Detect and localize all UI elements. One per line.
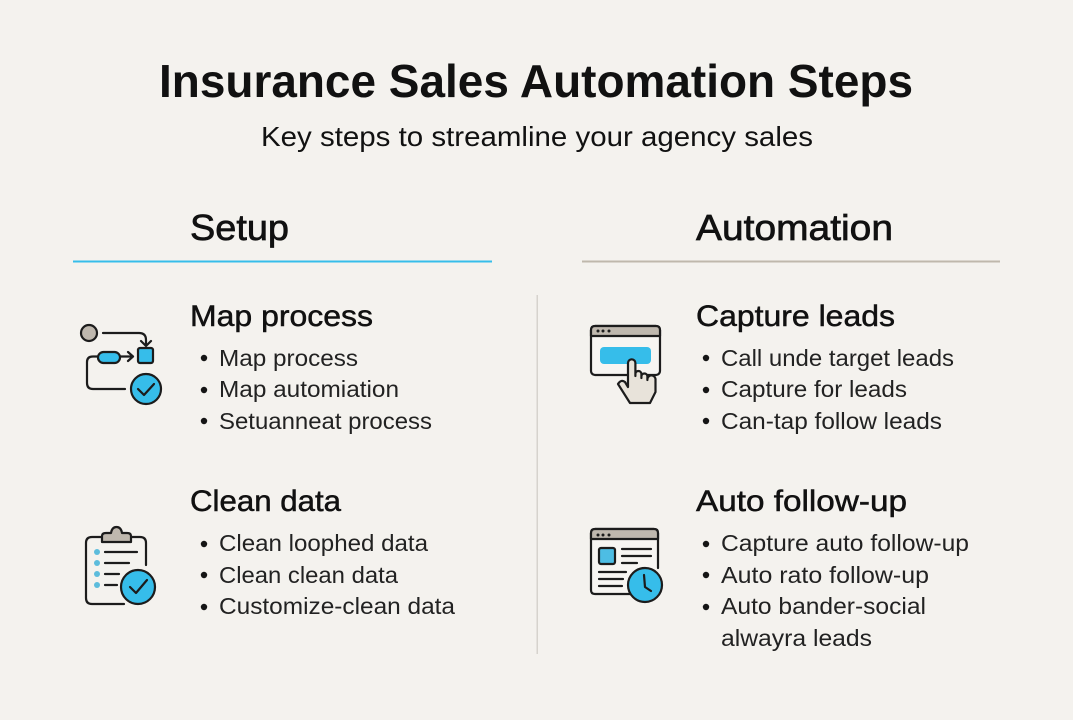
panel: Clean data xyxy=(86,485,456,619)
bullet list: Can-tap follow leads xyxy=(721,408,942,434)
column heading: Automation: Automation xyxy=(696,207,893,248)
panel: Capture leads xyxy=(591,300,954,434)
bullet list xyxy=(201,345,432,434)
title: Insurance Sales Automation Steps xyxy=(159,55,913,107)
bullet list xyxy=(201,530,456,619)
bullet list: Clean loophed data xyxy=(219,530,429,556)
bullet list: Map automiation xyxy=(219,376,399,402)
panel: Auto follow-up xyxy=(591,485,969,651)
bullet list: Clean clean data xyxy=(219,562,399,588)
column heading: Setup: Setup xyxy=(190,207,289,248)
heading: Clean data xyxy=(190,485,341,518)
bullet list: Call unde target leads xyxy=(721,345,954,371)
bullet list: Auto rato follow-up xyxy=(721,562,929,588)
heading: Auto follow-up xyxy=(696,485,907,518)
icon: clipboard checklist xyxy=(86,527,155,604)
panel: Map process xyxy=(81,300,432,434)
bullet list: alwayra leads xyxy=(721,625,872,651)
icon: process flow xyxy=(81,325,161,404)
bullet list: Capture auto follow-up xyxy=(721,530,969,556)
bullet list xyxy=(703,345,954,434)
heading: Map process xyxy=(190,300,373,333)
icon: browser with clock xyxy=(591,529,662,602)
bullet list: Auto bander-social xyxy=(721,593,926,619)
bullet list xyxy=(703,530,969,651)
bullet list: Customize-clean data xyxy=(219,593,456,619)
icon: browser with pointer xyxy=(591,326,660,403)
subtitle: Key steps to streamline your agency sales xyxy=(261,121,813,152)
bullet list: Map process xyxy=(219,345,358,371)
heading: Capture leads xyxy=(696,300,895,333)
bullet list: Capture for leads xyxy=(721,376,907,402)
bullet list: Setuanneat process xyxy=(219,408,432,434)
